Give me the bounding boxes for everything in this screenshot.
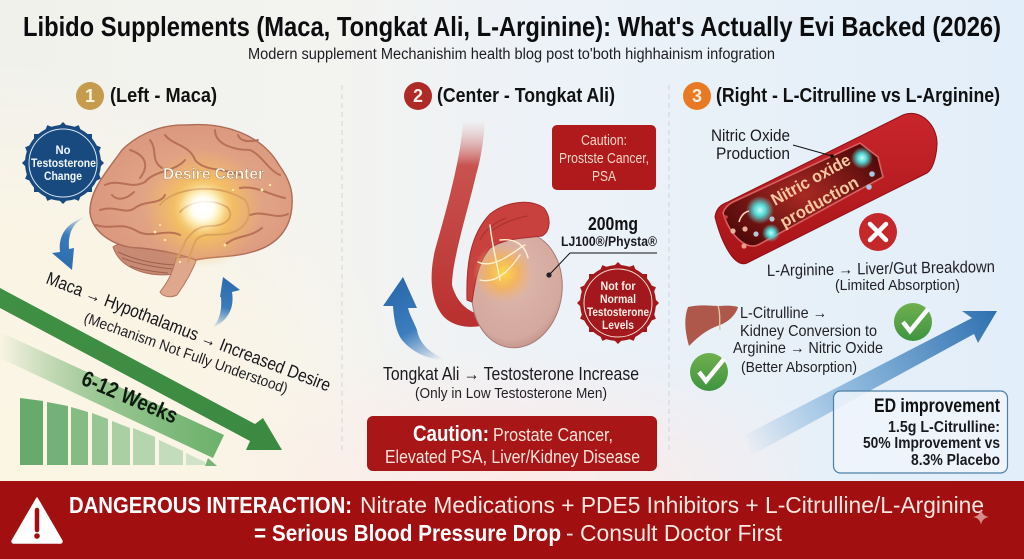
label: nitric oxide production in vessel: production xyxy=(777,173,862,231)
mechanism text: Maca → Hypothalamus → Increased Desire xyxy=(44,268,334,395)
label: nitric oxide production in vessel xyxy=(768,150,862,231)
heading: center tongkat ali xyxy=(404,82,615,110)
callout: caution box: Caution: xyxy=(581,133,627,149)
banner text line one xyxy=(69,492,984,518)
mechanism text: (Mechanism Not Fully Understood) xyxy=(82,310,290,398)
heading: center tongkat ali: (Center - Tongkat Ali) xyxy=(437,84,615,107)
badge: no testosterone change xyxy=(22,122,104,204)
text: l-citrulline: L-Citrulline → xyxy=(740,305,827,322)
banner text line two: - Consult Doctor First xyxy=(566,520,783,546)
mechanism text: Tongkat Ali → Testosterone Increase xyxy=(383,364,639,384)
warning banner xyxy=(0,481,1024,559)
callout: caution banner: Elevated PSA, Liver/Kidney Disease xyxy=(385,447,640,467)
label: nitric oxide production: Production xyxy=(716,145,790,163)
callout: caution banner xyxy=(367,416,657,471)
arrow: blue curved down xyxy=(52,216,88,270)
illustration: blood vessel xyxy=(715,113,937,264)
text: l-citrulline: (Better Absorption) xyxy=(741,359,857,376)
subtitle: Modern supplement Mechanishim health blog post to'both highhainism infogration xyxy=(248,46,775,63)
label: nitric oxide production xyxy=(711,127,834,163)
badge: not for normal testosterone levels: Normal xyxy=(600,294,636,306)
text: l-arginine: (Limited Absorption) xyxy=(835,277,960,294)
heading: right citrulline vs arginine xyxy=(683,82,1000,110)
icon: brain xyxy=(90,125,292,297)
text: l-citrulline: Kidney Conversion to xyxy=(740,323,877,340)
callout: ed improvement: 8.3% Placebo xyxy=(911,452,1000,469)
arrow: blue curved up xyxy=(212,277,240,328)
callout: ed improvement xyxy=(834,391,1008,473)
heading: center tongkat ali: 2 xyxy=(413,86,423,106)
text: l-citrulline: Arginine → Nitric Oxide xyxy=(733,340,883,357)
illustration: testis and cord xyxy=(432,120,570,354)
callout: caution box xyxy=(552,125,656,190)
callout: 200mg dosage xyxy=(546,214,657,278)
banner text line two: = Serious Blood Pressure Drop xyxy=(254,520,561,546)
badge: no testosterone change: Testosterone xyxy=(31,156,96,170)
heading: left maca: (Left - Maca) xyxy=(110,84,217,107)
heading: left maca: 1 xyxy=(85,86,95,106)
callout: ed improvement: 50% Improvement vs xyxy=(863,435,1000,452)
banner text line one: Nitrate Medications + PDE5 Inhibitors + L-Citrulline/L-Arginine xyxy=(360,492,984,518)
callout: caution box: Prostste Cancer, xyxy=(559,151,649,167)
badge: no testosterone change: No xyxy=(56,143,70,157)
bar chart: weeks xyxy=(20,398,217,466)
arrow: green timeline xyxy=(0,288,282,450)
mechanism text: (Only in Low Testosterone Men) xyxy=(415,385,607,402)
callout: caution box: PSA xyxy=(592,169,616,185)
icon: check two xyxy=(894,303,932,341)
text: l-arginine: L-Arginine → Liver/Gut Breakdown xyxy=(767,258,995,280)
badge: not for normal testosterone levels: Levels xyxy=(602,320,634,332)
panel: citrulline vs arginine xyxy=(683,82,1008,473)
text: l-arginine xyxy=(767,258,995,294)
badge: not for normal testosterone levels: Testosterone xyxy=(587,307,649,319)
mechanism text xyxy=(383,364,639,402)
arrow: blue up xyxy=(383,277,443,360)
icon: check one xyxy=(690,353,728,391)
icon: warning triangle xyxy=(12,498,62,543)
banner text line one: DANGEROUS INTERACTION: xyxy=(69,492,352,518)
callout: caution banner: Caution: xyxy=(413,421,489,446)
ribbon: 6-12 weeks: 6-12 Weeks xyxy=(78,366,182,428)
label: desire center: Desire Center xyxy=(163,166,264,183)
callout: 200mg dosage: 200mg xyxy=(588,214,638,234)
heading: left maca xyxy=(76,82,217,110)
icon: red x xyxy=(859,213,897,251)
ribbon: 6-12 weeks xyxy=(0,332,224,458)
callout: ed improvement: 1.5g L-Citrulline: xyxy=(888,419,1000,436)
callout: caution banner: Prostate Cancer, xyxy=(493,425,613,445)
label: nitric oxide production in vessel: Nitric oxide xyxy=(768,150,854,209)
badge: not for normal testosterone levels: Not for xyxy=(600,281,636,293)
heading: right citrulline vs arginine: 3 xyxy=(692,86,702,106)
arrow: blue rising xyxy=(745,311,997,455)
badge: no testosterone change: Change xyxy=(44,169,82,183)
label: nitric oxide production: Nitric Oxide xyxy=(711,127,790,145)
badge: not for normal testosterone levels xyxy=(577,262,659,344)
panel: maca xyxy=(0,82,334,466)
icon: liver xyxy=(685,305,738,346)
text: l-citrulline xyxy=(733,305,883,376)
callout: 200mg dosage: LJ100®/Physta® xyxy=(561,234,657,249)
banner text line two xyxy=(254,520,783,546)
callout: ed improvement: ED improvement xyxy=(874,396,1001,417)
panel: tongkat ali xyxy=(367,82,659,471)
